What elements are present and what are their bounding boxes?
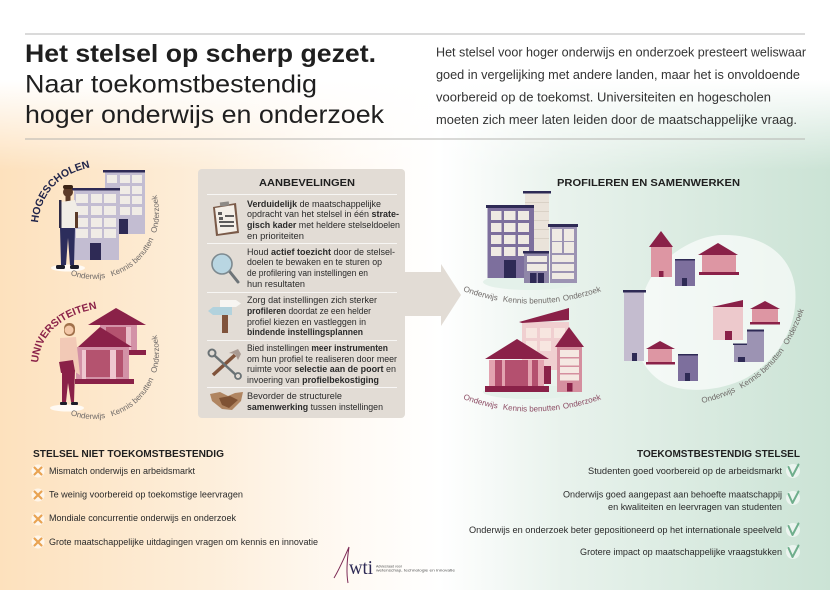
recommendation 5: Bevorder de structurele	[247, 391, 342, 401]
arc labels: top: Onderwijs Kennis benuttenOnderzoek	[464, 286, 602, 304]
icons: checks	[786, 464, 800, 559]
heading: TOEKOMSTBESTENDIG STELSEL	[637, 448, 801, 460]
recommendation 3: Zorg dat instellingen zich sterker	[247, 295, 377, 305]
illustration: merged university buildings	[483, 308, 584, 399]
arrow	[400, 264, 461, 326]
intro text: Het stelsel voor hoger onderwijs en onderzoek presteert weliswaar	[436, 44, 807, 60]
panel: universiteiten	[30, 302, 160, 420]
list items	[469, 466, 782, 557]
recommendation 1: gisch kader met heldere stelseldoelen	[247, 220, 400, 230]
recommendation 1: en prioriteiten	[247, 231, 304, 241]
recommendation 2	[247, 247, 395, 289]
recommendation 3: profileren doordat ze een helder	[247, 306, 371, 316]
recommendation 2: de profilering van instellingen en	[247, 268, 368, 278]
recommendation 2: doelen te bewaken en te sturen op	[247, 257, 382, 267]
heading: STELSEL NIET TOEKOMSTBESTENDIG	[33, 448, 224, 460]
header rule bottom	[25, 138, 805, 140]
recommendation 4: ruimte voor selectie aan de poort en	[247, 364, 396, 374]
list items: Onderwijs goed aangepast aan behoefte maatschappij	[563, 490, 782, 500]
icon: university buildings	[75, 308, 146, 384]
recommendation 4: invoering van profielbekostiging	[247, 375, 379, 385]
list items: Grote maatschappelijke uitdagingen vragen om kennis en innovatie	[49, 537, 318, 547]
recommendation 4: om hun profiel te realiseren door meer	[247, 354, 397, 364]
intro text: voorbereid op de toekomst. Universiteiten en hogescholen	[436, 90, 771, 104]
icon: student	[51, 185, 85, 272]
intro text	[436, 44, 807, 127]
arc labels: hogescholen: Onderwijs Kennis benuttenOnderzoek	[71, 194, 160, 280]
title	[25, 40, 385, 129]
panel: aanbevelingen	[198, 169, 405, 418]
icon: clipboard	[213, 201, 239, 236]
recommendation 1: Verduidelijk de maatschappelijke	[247, 199, 381, 209]
list items: Studenten goed voorbereid op de arbeidsmarkt	[588, 466, 782, 476]
arc labels: bottom: Onderwijs Kennis benuttenOnderzoek	[464, 394, 602, 412]
icons: crosses	[32, 464, 44, 548]
header rule top	[25, 34, 805, 35]
list items: Onderwijs en onderzoek beter gepositioneerd op het internationale speelveld	[469, 525, 782, 535]
recommendation 3: bindende instellingsplannen	[247, 327, 363, 337]
title: hoger onderwijs en onderzoek	[25, 101, 385, 129]
arc labels: village: OnderwijsKennis benuttenOnderzoek	[702, 308, 804, 402]
title: Naar toekomstbestendig	[25, 70, 317, 98]
recommendation 3	[247, 295, 377, 337]
icon: tools	[208, 349, 241, 379]
list items: Grotere impact op maatschappelijke vraagstukken	[580, 547, 782, 557]
recommendation 3: profiel kiezen en vastleggen in	[247, 317, 366, 327]
recommendation 1: opdracht van het stelsel in één strate-	[247, 209, 399, 219]
list items: Mismatch onderwijs en arbeidsmarkt	[49, 466, 195, 476]
intro text: moeten zich meer laten leiden door de maatschappelijke vraag.	[436, 112, 797, 127]
logo: awti	[334, 547, 456, 583]
recommendation 2: hun resultaten	[247, 279, 305, 289]
list items: Mondiale concurrentie onderwijs en onderzoek	[49, 513, 237, 523]
icon: signpost	[208, 300, 241, 333]
icon: handshake	[210, 392, 243, 410]
illustration: merged hogeschool buildings	[483, 191, 578, 290]
list items	[49, 466, 318, 547]
heading: hogescholen: HOGESCHOLEN	[30, 160, 90, 222]
logo: awti: Adviesraad voor	[376, 564, 403, 568]
heading: profileren en samenwerken: PROFILEREN EN SAMENWERKEN	[557, 177, 740, 189]
panel: toekomstbestendig stelsel	[469, 448, 801, 559]
arc labels: universiteiten: Onderwijs Kennis benuttenOnderzoek	[71, 334, 160, 420]
title: Het stelsel op scherp gezet.	[25, 40, 376, 68]
illustration: village of institutions	[623, 231, 796, 390]
recommendation 1	[247, 199, 400, 241]
recommendation 5	[247, 391, 383, 412]
recommendation 4: Bied instellingen meer instrumenten	[247, 343, 388, 353]
logo: awti: wti	[349, 557, 373, 579]
list items: en kwaliteiten en leervragen van studenten	[608, 502, 782, 512]
panel: hogescholen	[30, 160, 160, 280]
panel: stelsel niet toekomstbestendig	[32, 448, 318, 548]
heading: universiteiten: UNIVERSITEITEN	[30, 302, 96, 362]
intro text: goed in vergelijking met andere landen, maar het is onvoldoende	[436, 67, 800, 82]
logo: awti: wetenschap, technologie en innovatie	[376, 568, 456, 572]
icon: hogeschool buildings	[72, 170, 145, 260]
icon: student woman	[50, 323, 84, 412]
recommendation 2: Houd actief toezicht door de stelsel-	[247, 247, 395, 257]
recommendation 4	[247, 343, 397, 385]
list items: Te weinig voorbereid op toekomstige leervragen	[49, 490, 243, 500]
icon: magnifying glass	[212, 254, 238, 282]
heading: aanbevelingen: AANBEVELINGEN	[259, 177, 355, 189]
recommendation 5: samenwerking tussen instellingen	[247, 402, 383, 412]
